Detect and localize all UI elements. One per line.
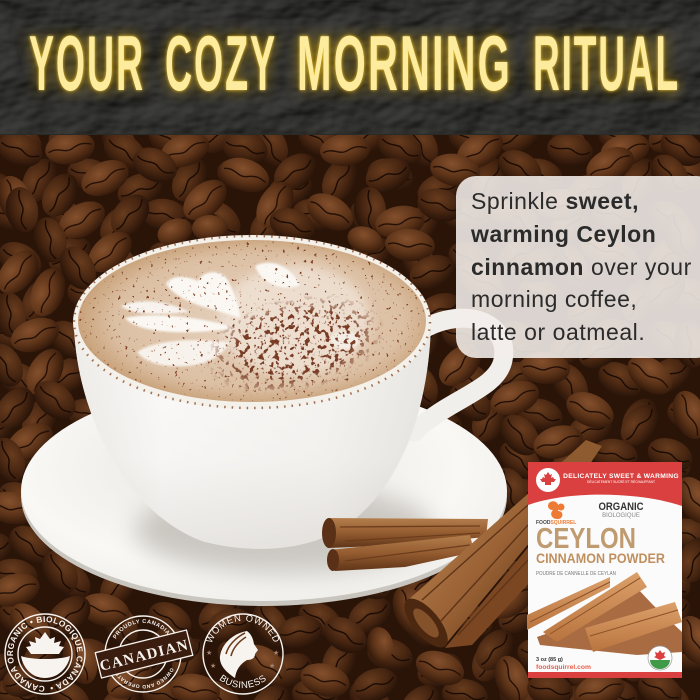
icon: stars: ★ bbox=[210, 662, 216, 670]
sachet: brand: FOODSQUIRREL bbox=[536, 520, 576, 526]
sachet: tagline: DÉLICATEMENT SUCRÉ ET RÉCHAUFFANT bbox=[587, 479, 655, 484]
icon: maple leaf bbox=[26, 632, 64, 654]
sachet: tagline: DELICATELY SWEET & WARMING bbox=[563, 473, 679, 480]
sachet: website: foodsquirrel.com bbox=[536, 664, 592, 671]
title: COZY bbox=[165, 19, 277, 107]
icon: canada badge bbox=[536, 468, 560, 492]
banner: CANADIAN bbox=[98, 637, 191, 675]
sachet: weight: 3 oz (85 g) bbox=[536, 657, 563, 663]
cinnamon sticks bbox=[322, 440, 602, 654]
title: YOUR bbox=[29, 19, 145, 107]
latte art bbox=[121, 263, 370, 375]
icon: organic seal bbox=[648, 646, 672, 670]
stick: horizontal bbox=[322, 518, 488, 571]
icon: woman profile bbox=[220, 631, 258, 678]
title banner background bbox=[0, 0, 700, 135]
panel: description: morning coffee, bbox=[471, 286, 637, 312]
panel: description: latte or oatmeal. bbox=[471, 319, 645, 345]
badge: Canada Organic: CANADA ORGANIC • BIOLOGIQUE CANADA • bbox=[7, 616, 83, 692]
icon: stars bbox=[206, 649, 279, 670]
sachet: product type: CINNAMON POWDER bbox=[536, 551, 665, 566]
badge: Proudly Canadian: OWNED AND OPERATED bbox=[116, 668, 174, 688]
sachet: organic bbox=[598, 501, 644, 519]
panel: description bbox=[456, 176, 700, 358]
sachet: organic: ORGANIC bbox=[598, 501, 644, 513]
sachet: french name: POUDRE DE CANNELLE DE CEYLAN bbox=[536, 571, 616, 577]
badge: Women Owned Business: WOMEN OWNED bbox=[206, 614, 279, 642]
sachet: organic: BIOLOGIQUE bbox=[602, 513, 640, 519]
sachet: product name: CEYLON bbox=[536, 523, 636, 555]
saucer bbox=[21, 381, 507, 606]
sachet: cinnamon illustration bbox=[527, 572, 682, 655]
cinnamon dust bbox=[79, 241, 424, 401]
badge: Women Owned Business bbox=[202, 613, 284, 695]
icon: stars: ★ bbox=[273, 649, 279, 657]
icon: squirrel logo bbox=[548, 501, 564, 519]
coffee surface bbox=[78, 240, 426, 402]
cup handle bbox=[414, 318, 504, 432]
coffee cup bbox=[70, 230, 431, 549]
cup rim bbox=[73, 235, 431, 409]
badge: Proudly Canadian: PROUDLY CANADIAN bbox=[112, 619, 170, 639]
sachet: tagline bbox=[563, 473, 679, 484]
panel: description: cinnamon over your bbox=[471, 254, 692, 280]
icon: field bbox=[21, 656, 70, 678]
sachet: red pack bbox=[528, 462, 682, 678]
title: MORNING bbox=[297, 19, 512, 107]
product sachet bbox=[527, 462, 682, 678]
panel: description: Sprinkle sweet, bbox=[471, 188, 639, 214]
badge: Women Owned Business: BUSINESS bbox=[220, 674, 266, 688]
icon: stars: ★ bbox=[269, 662, 275, 670]
title bbox=[29, 19, 680, 107]
icon: stars: ★ bbox=[206, 649, 212, 657]
panel: description: warming Ceylon bbox=[470, 221, 656, 247]
sachet: white panel bbox=[528, 495, 682, 672]
stick: diagonal bbox=[397, 440, 602, 654]
badge: Proudly Canadian bbox=[94, 615, 194, 693]
